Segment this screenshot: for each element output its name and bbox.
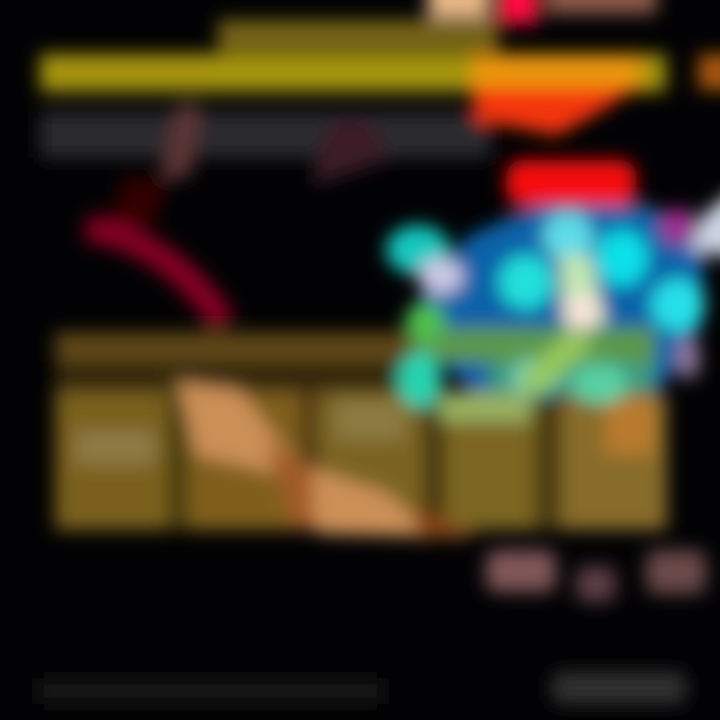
table cell highlights (75, 395, 655, 465)
pink footnote clusters (486, 550, 706, 602)
pale central column (518, 255, 606, 398)
red funnel below headline (472, 88, 636, 136)
title: upper line (218, 20, 498, 52)
lavender node and pink accents (419, 185, 720, 380)
footer source line (38, 678, 383, 704)
maroon vertical strokes (110, 105, 390, 225)
footer logo (552, 672, 686, 704)
subtitle text block (40, 112, 490, 158)
red pill label (506, 160, 636, 206)
title: main line (40, 54, 666, 92)
table columns (55, 380, 667, 530)
header graphic: top right (428, 0, 657, 24)
table header row (55, 332, 415, 392)
cyan nodes (386, 212, 705, 408)
diagonal peach arrow (178, 382, 480, 540)
orange edge mark (698, 54, 720, 90)
table panel (55, 332, 667, 530)
blue glow cluster (420, 205, 705, 400)
dark red curved stroke (86, 228, 224, 324)
green band (415, 328, 655, 422)
